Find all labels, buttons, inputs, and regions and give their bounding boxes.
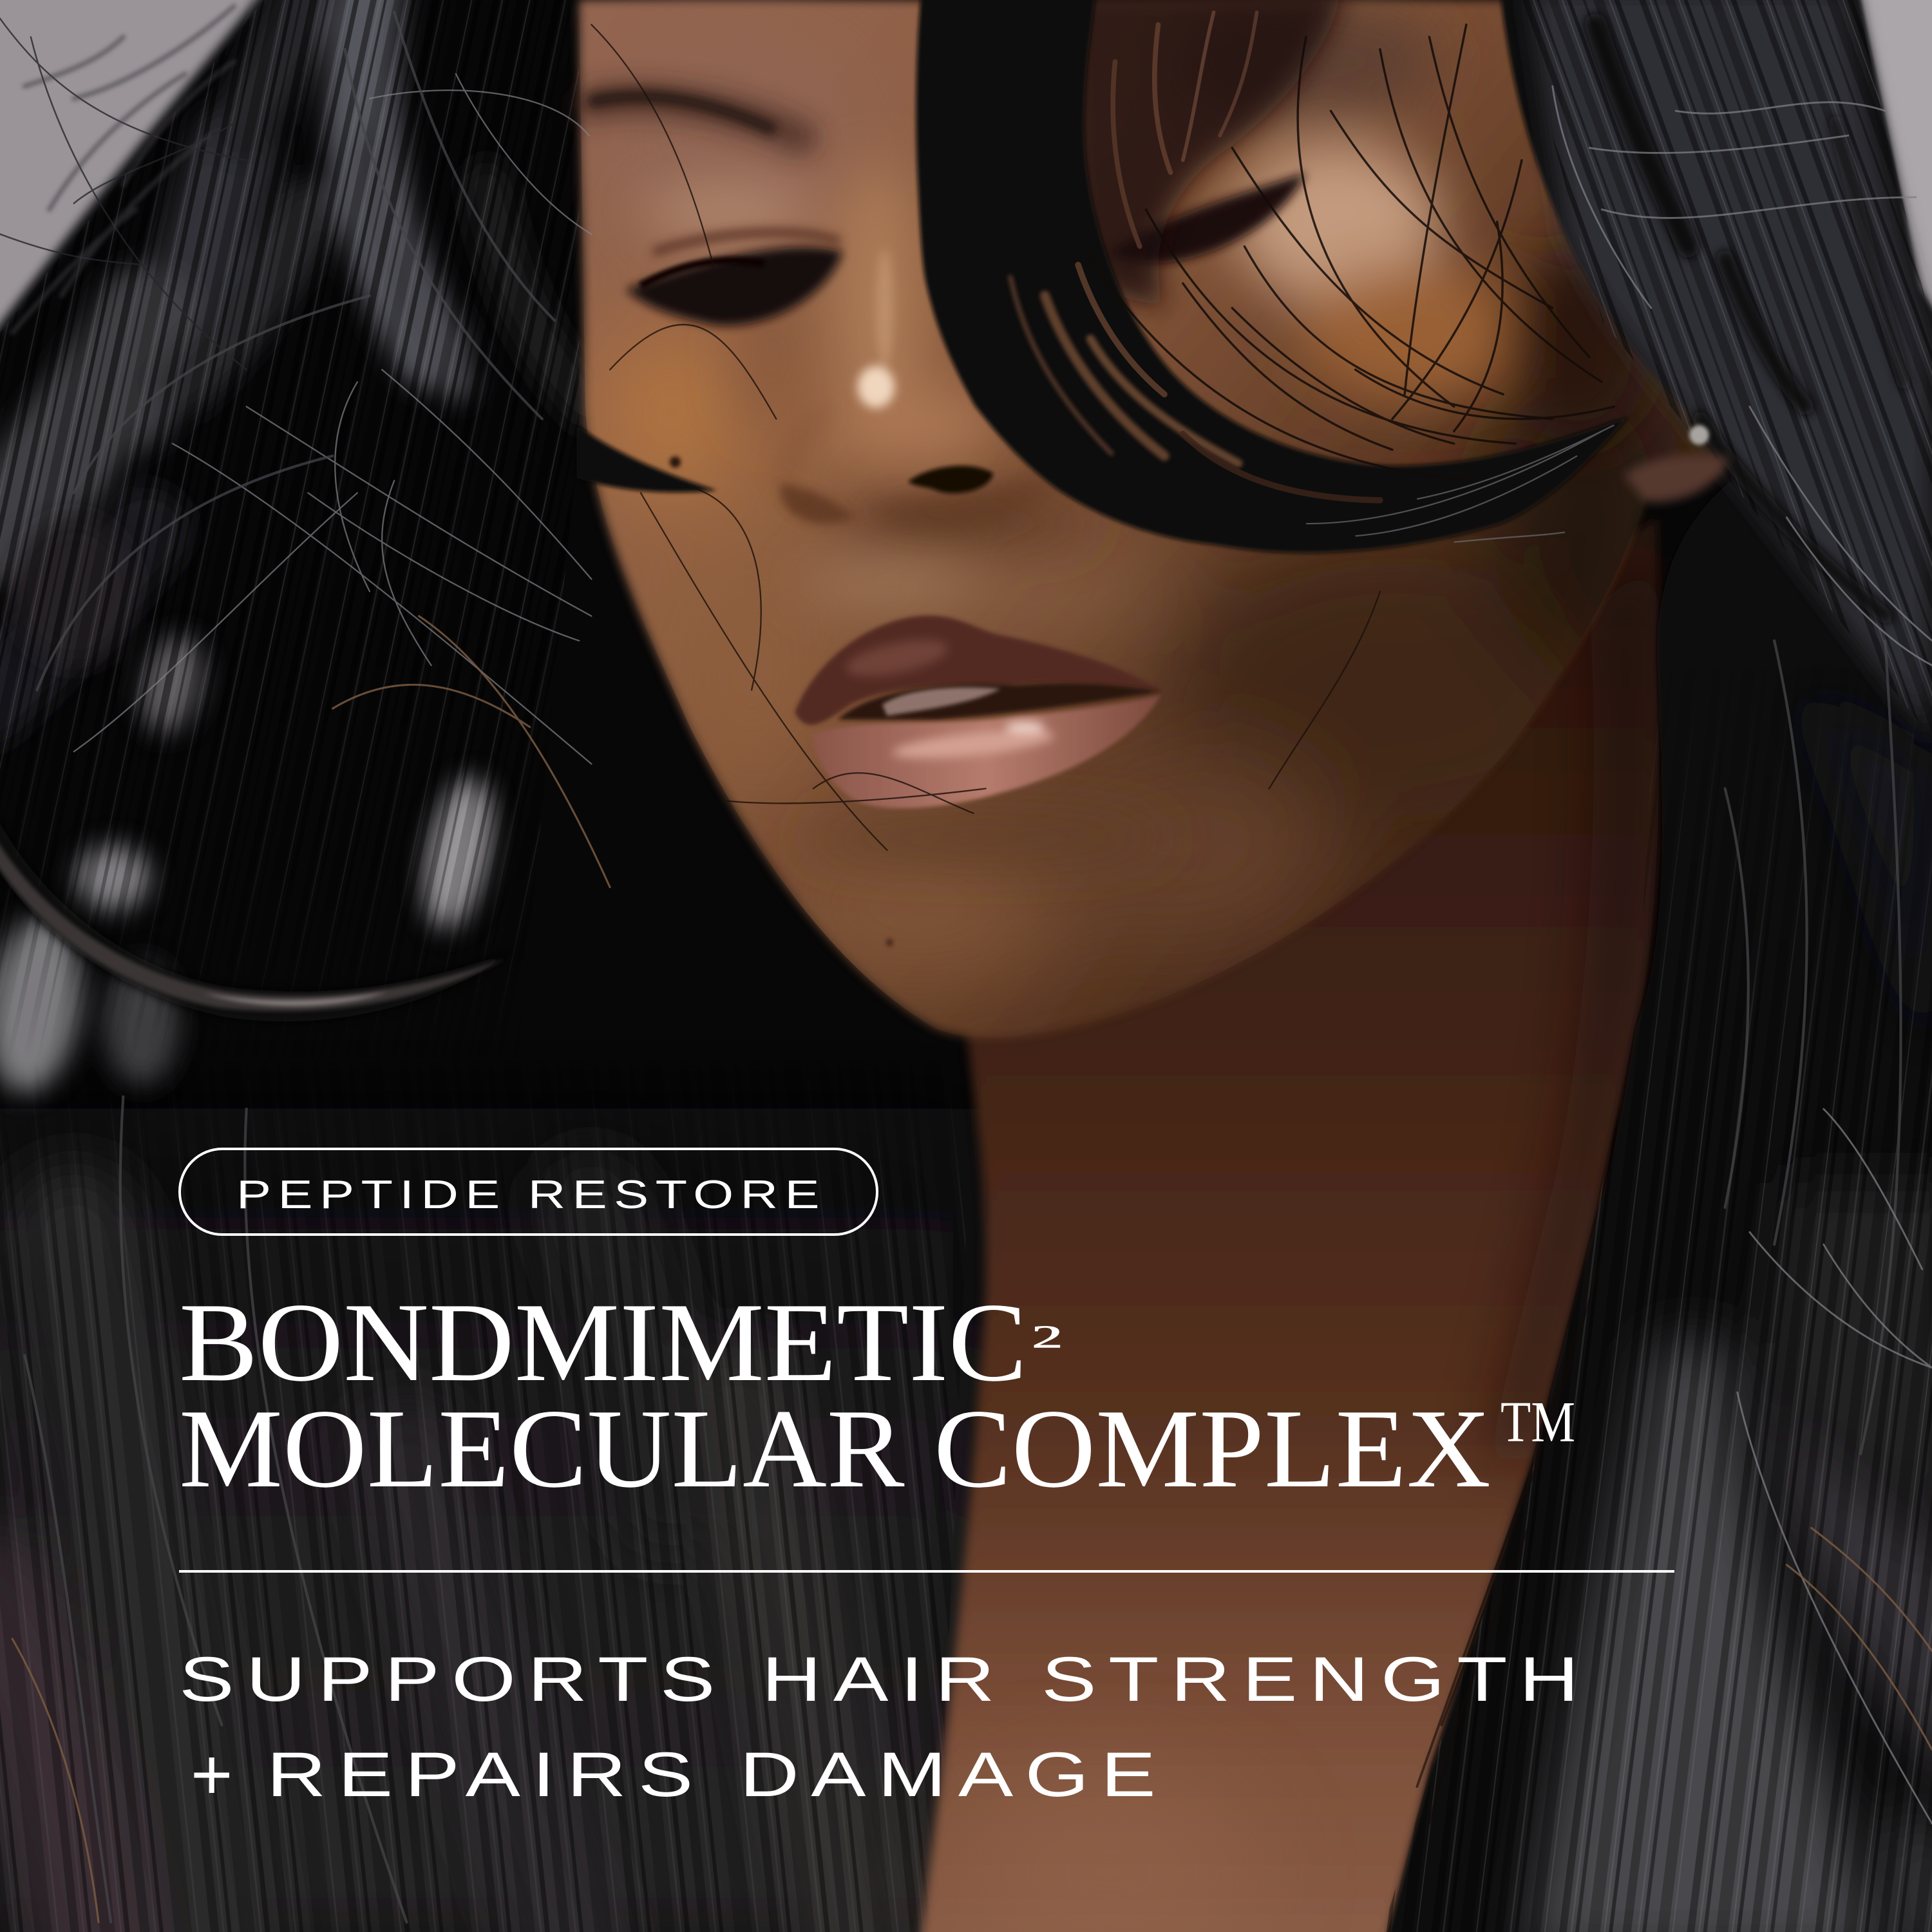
right hair mass	[1383, 0, 1932, 1932]
earring stud	[1689, 425, 1709, 445]
title line 1: BONDMIMETIC	[179, 1280, 1027, 1405]
upper right hair sheen	[1528, 0, 1932, 739]
right hair	[1383, 0, 1932, 1932]
trademark: TM	[1501, 1390, 1575, 1454]
chin mark	[886, 939, 893, 946]
translucent fringe veil	[1059, 0, 1343, 308]
lips	[795, 616, 1160, 808]
lock body	[0, 826, 505, 1011]
fringe main mass	[916, 0, 1629, 553]
grey clump near crown	[0, 0, 589, 703]
skin tone modelling	[579, 0, 1688, 986]
feathered hair edge on backdrop	[12, 6, 234, 333]
upper right hair texture	[1515, 0, 1932, 739]
earlobe	[1624, 455, 1728, 502]
fringe	[916, 0, 1629, 553]
upper lip gloss	[844, 633, 951, 683]
right eye	[1109, 173, 1306, 263]
face	[579, 0, 1725, 1037]
pill outline	[180, 1149, 877, 1235]
face base shape	[579, 0, 1725, 1037]
upper lip	[795, 616, 1160, 725]
lower right hair sheen	[1528, 690, 1932, 1932]
dark seams in upper right hair	[1596, 24, 1904, 616]
backdrop top left	[0, 0, 277, 357]
light strands on left	[74, 74, 591, 764]
divider line	[179, 1570, 1674, 1573]
title line 2: MOLECULAR COMPLEX	[179, 1386, 1491, 1511]
neck edge shadow	[1485, 542, 1660, 1459]
fine dark fringe strands	[1084, 24, 1614, 480]
curved hair lock	[0, 801, 518, 1021]
lock shadow	[0, 801, 518, 1021]
title	[179, 1280, 1575, 1511]
skin seen through fringe	[1010, 12, 1380, 500]
bright strands in right hair	[1553, 86, 1932, 1824]
fringe tail grey strands	[1306, 425, 1614, 542]
top left hair streak texture	[0, 0, 579, 1059]
hair wisp over cheek	[576, 425, 717, 492]
nose shine	[858, 249, 895, 408]
strands on backdrop	[0, 19, 247, 370]
teeth	[882, 687, 1001, 716]
beauty mark	[670, 457, 681, 468]
plus sign: +	[191, 1734, 232, 1815]
lock highlight	[204, 992, 388, 1006]
pill label: Peptide Restore	[180, 1149, 877, 1235]
left eye	[626, 232, 843, 326]
lower lip	[812, 695, 1160, 808]
mouth interior	[838, 683, 1160, 719]
mid hair highlights	[0, 518, 503, 1098]
superscript 2: ²	[1030, 1314, 1063, 1374]
dark strands on face	[591, 24, 1380, 850]
pill text: PEPTIDE RESTORE	[236, 1173, 826, 1217]
bronze strands	[12, 616, 1932, 1922]
lower hair streak texture	[0, 1180, 966, 1932]
neck and chest	[918, 518, 1660, 1932]
subtitle line 1: SUPPORTS HAIR STRENGTH	[179, 1643, 1591, 1714]
left eyebrow	[589, 97, 801, 138]
lower hair base	[0, 1109, 986, 1932]
lower right hair texture	[1383, 665, 1932, 1932]
lower lip gloss	[891, 721, 1056, 764]
grey studio backdrop	[0, 0, 1932, 357]
backdrop top right	[1855, 0, 1932, 357]
subtitle	[179, 1643, 1591, 1815]
neck highlight	[961, 1774, 1257, 1932]
wispy strands at neck edge	[1417, 1257, 1602, 1824]
left hair clumps	[0, 0, 974, 1932]
subtitle line 2: REPAIRS DAMAGE	[267, 1739, 1168, 1810]
lower hair sheen	[0, 1208, 850, 1932]
nose shadow and nostril	[780, 409, 1059, 532]
